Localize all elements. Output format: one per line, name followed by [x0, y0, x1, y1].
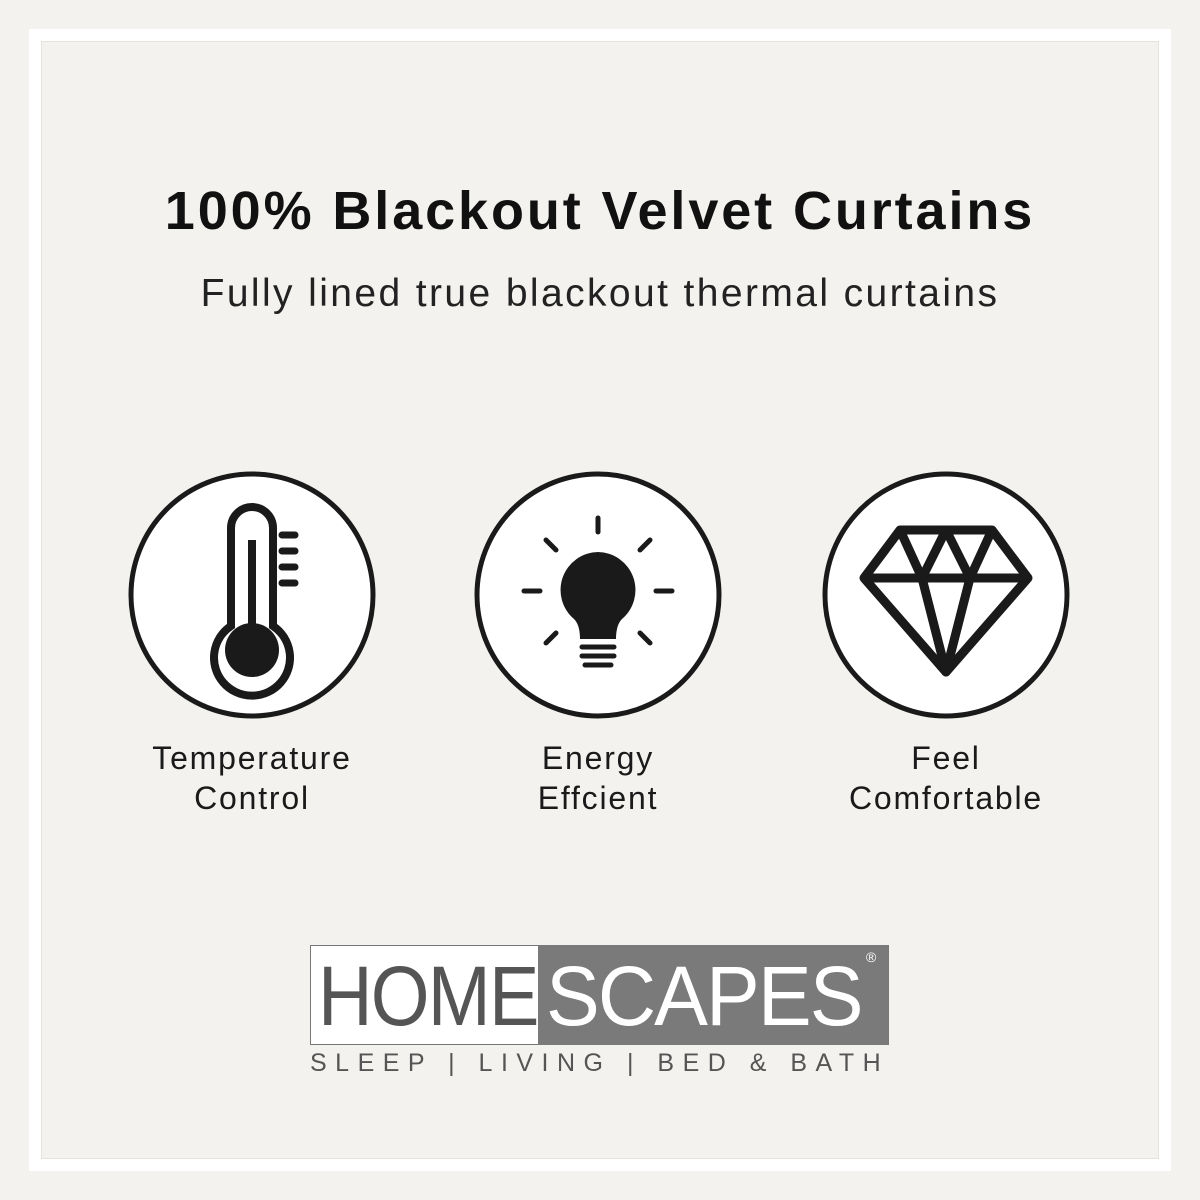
label: energy efficient — [538, 740, 658, 816]
subtitle: Fully lined true blackout thermal curtains — [201, 272, 999, 315]
label: feel comfortable: Feel — [911, 740, 981, 776]
logo: SCAPES — [546, 949, 862, 1043]
label: temperature control: Control — [194, 780, 310, 816]
icon: diamond — [825, 474, 1067, 716]
logo box — [310, 945, 889, 1045]
logo: ® — [866, 949, 876, 965]
logo — [310, 945, 889, 1077]
label: feel comfortable — [849, 740, 1043, 816]
label: temperature control: Temperature — [152, 740, 352, 776]
title: 100% Blackout Velvet Curtains — [165, 181, 1035, 241]
icon: thermometer — [131, 474, 373, 716]
icon: light bulb — [477, 474, 719, 716]
label: energy efficient: Effcient — [538, 780, 658, 816]
label: energy efficient: Energy — [542, 740, 654, 776]
logo: HOME — [318, 949, 538, 1043]
tagline: SLEEP | LIVING | BED & BATH — [310, 1049, 889, 1077]
label: temperature control — [152, 740, 352, 816]
label: feel comfortable: Comfortable — [849, 780, 1043, 816]
